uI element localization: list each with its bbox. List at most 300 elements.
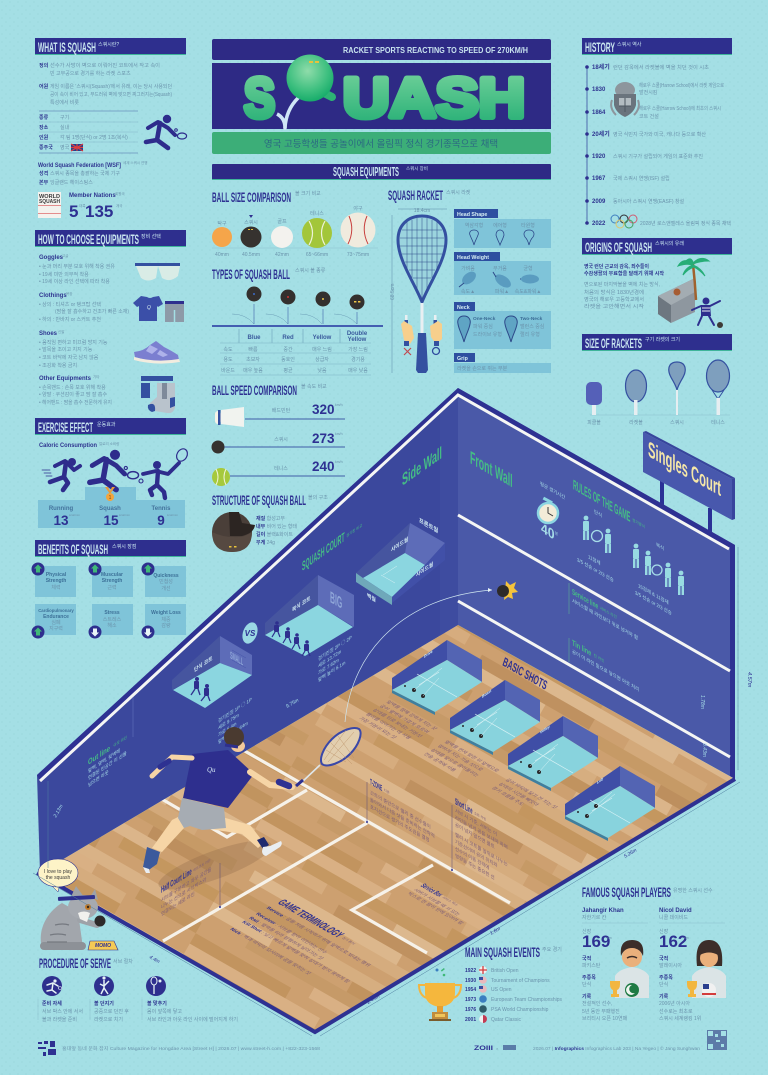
panel: squash racket (388, 187, 551, 373)
head shape panel: Head Shape (457, 212, 487, 218)
origins text: 처음의 방식은 1830년경에 (584, 289, 644, 296)
basic shots (357, 640, 655, 841)
member nations stat: 대륙 (79, 203, 86, 208)
head weight panel: 균형 (523, 265, 533, 272)
cat body (40, 886, 106, 950)
events list: US Open (491, 987, 512, 993)
subtitle band: 영국 고등학생들 공놀이에서 올림픽 정식 경기종목으로 채택 (264, 138, 498, 150)
timeline: 1830 (592, 87, 606, 93)
racket labels: 스쿼시 (670, 419, 684, 426)
heading: PROCEDURE OF SERVE (39, 955, 111, 971)
comparison table: Yellow (348, 337, 367, 343)
timeline: 코트 건설 (639, 113, 659, 120)
floor lines (160, 750, 510, 953)
half court line note: 하프코트 라인 (193, 857, 211, 873)
stats: 선수로는 최초로 (659, 1008, 693, 1015)
small court: 단식 코트 (194, 654, 212, 674)
definition text: 정의 (39, 62, 49, 69)
stats: 국적 (659, 955, 669, 962)
heading: 스쿼시 역사 (617, 41, 642, 48)
speed values: km/h (335, 460, 343, 464)
short line note: 라인을 넘겨 공을 보내야 하며 (455, 814, 508, 851)
neck panel: 밸런스 중심 (520, 323, 544, 330)
shot text: volley (490, 777, 560, 818)
events list: PSA World Championship (491, 1007, 549, 1013)
card labels: Weight Loss (151, 610, 181, 616)
credits: 2026.07 | Infographics Infographics Lab 203 | Na Yegeo | © Jang Sunghwan (533, 1046, 701, 1051)
step text: 볼 던지기 (94, 1000, 114, 1007)
ball labels: 42mm (275, 252, 289, 258)
member nations stat (69, 191, 125, 221)
court structure: 사이드월 (416, 560, 433, 579)
big court specs: 앞벽 높이 6.1m (318, 659, 345, 684)
racket (296, 728, 361, 786)
calorie stats: kcal/min (69, 513, 80, 517)
comparison table: 용도 (223, 357, 233, 363)
vs badge (240, 620, 260, 646)
shoes text: Shoes (39, 331, 58, 337)
definition text: 빈 고무공으로 경기를 하는 라켓 스포츠 (50, 70, 131, 77)
comparison table: 초보자 (246, 356, 260, 363)
big court specs: 경기인원 2P ◯ 2P (318, 634, 352, 663)
ball trajectory (345, 581, 518, 722)
panel: types of squash ball (212, 266, 383, 375)
speed values: km/h (335, 403, 343, 407)
heading: HISTORY (585, 39, 615, 55)
events list (465, 966, 563, 1023)
court structure: 사이드월 (391, 535, 408, 554)
icon: cut ball (212, 512, 255, 552)
events list: 1922 (465, 968, 476, 974)
doubles players: 15점제 & 11점제 (638, 582, 669, 607)
federation info: 스쿼시 종목을 총괄하는 국제 기구 (50, 170, 120, 177)
out line note: 연결된 빈공간 이 선을 (88, 749, 127, 782)
federation info: 성격 (39, 170, 49, 177)
facts table: 종주국 (39, 145, 53, 151)
half court line note (161, 853, 221, 918)
dimensions (33, 547, 752, 1036)
panel: procedure of serve (38, 955, 238, 1023)
portrait (687, 940, 726, 998)
card grid (35, 566, 186, 635)
heading: squash equipments band: SQUASH EQUIPMENTS (333, 164, 399, 179)
wall lines (40, 395, 730, 781)
stats: 2006년 아시아 (659, 1000, 690, 1007)
heading (573, 476, 645, 534)
head (224, 727, 245, 752)
medal: 1 (109, 495, 112, 501)
heading: SQUASH COURT (302, 529, 345, 574)
top strap (212, 39, 551, 60)
facts table: 구기 (60, 114, 69, 121)
comparison table: Double (347, 331, 368, 337)
definition text: 어원 (39, 83, 49, 90)
panel: exercise effect (35, 418, 190, 528)
timeline: 1920 (592, 154, 606, 160)
short line note: 기준선이며 공의 위치와 (455, 838, 498, 870)
clothings text: • 상의 : 티셔츠 or 탱크탑 선택 (39, 301, 101, 308)
comparison table: Yellow (313, 335, 332, 341)
singles players: 단식 (594, 508, 602, 520)
name: Jahangir Khan (582, 908, 624, 914)
heading (388, 187, 471, 203)
stats (659, 928, 701, 1022)
comparison table: 매우 느림 (312, 346, 332, 353)
doubles players: 복식 (656, 541, 664, 553)
service box note: Service Box (418, 882, 445, 898)
player (143, 727, 361, 873)
facts table: 각 팀 1명(단식) or 2명 1조(복식) (60, 134, 128, 141)
big court: BIG (330, 588, 342, 613)
neck panel: Two-Neck (520, 316, 543, 322)
shot text: drive (357, 699, 439, 748)
icon: squash player (146, 115, 187, 148)
speed values: 240 (312, 459, 335, 474)
torso (183, 750, 254, 808)
heading: benefits: 스쿼시 장점 (112, 543, 136, 550)
measure labels: 0.43m (701, 743, 707, 757)
other equipments text (39, 374, 112, 406)
speed values: 273 (312, 431, 335, 446)
ball labels: 테니스 (310, 210, 324, 217)
timeline: 18세기 (592, 63, 610, 71)
player: jahangir khan (582, 908, 649, 1022)
top strap: RACKET SPORTS REACTING TO SPEED OF 270KM/H (343, 46, 528, 55)
footer (38, 1030, 727, 1056)
terms list: Rail : 옆벽을 따라 평행하게 날아가는 샷 (247, 916, 326, 961)
icon: shuttlecock (215, 407, 244, 427)
comparison table: 평균 (283, 367, 293, 374)
calorie stats: 15 (103, 513, 119, 528)
stats: 기록 (659, 993, 669, 1000)
half court line note: 나누는 선으로 서브박스와 (161, 876, 207, 911)
speech bubble: I love to play (44, 869, 73, 875)
step text: 공중으로 던진 후 (94, 1008, 129, 1015)
head weight panel: 무거움 (493, 265, 507, 272)
panel: origins of squash (582, 238, 732, 328)
stat: average time: 40 (541, 519, 555, 543)
speed values: 스쿼시 (274, 436, 288, 443)
t-zone note: 티존 (384, 787, 390, 796)
icon: socks and bands (141, 376, 175, 413)
small court specs: 경기인원 1P ◯ 1P (218, 696, 252, 725)
name: Nicol David (659, 908, 692, 914)
small court players (191, 677, 210, 701)
stats (582, 928, 628, 1022)
stats: 169 (582, 932, 610, 951)
heading: what is squash: 스쿼시란? (98, 41, 119, 48)
half court line note: Half Court Line (161, 866, 192, 895)
heading (212, 189, 321, 205)
other equipments text: 기타 (93, 374, 100, 379)
name: 자한기르 칸 (582, 914, 607, 921)
comparison table: 속도 (223, 346, 233, 353)
podium (38, 487, 185, 528)
heading: exercise effect: 운동효과 (97, 421, 116, 428)
out line note: Out line (88, 743, 110, 767)
grip panel: Grip (457, 356, 469, 362)
heading: exercise effect: EXERCISE EFFECT (38, 419, 93, 435)
step text: 서브 라인과 아웃 라인 사이에 떨어지게 하기 (147, 1016, 238, 1023)
heading: ORIGINS OF SQUASH (585, 239, 652, 255)
shoes text: • 조깅화 착용 금지 (39, 362, 77, 369)
measure labels: 4.57m (746, 672, 752, 688)
step text (38, 999, 238, 1023)
service box note: 박스로 한 발이 안에 있어야 함 (405, 891, 466, 926)
shot text: drive: 가장 기본이 되는 샷 (357, 716, 399, 740)
shoes text (39, 329, 108, 369)
logo: world squash: WORLD (39, 194, 60, 200)
stats: 단식 (582, 981, 591, 988)
court structure: 프론트월 (419, 516, 439, 535)
measure labels: 5.26m (623, 848, 638, 860)
t-zone note: 코트의 중앙으로 랠리 중 선수들이 (370, 789, 431, 831)
small court specs (218, 696, 252, 746)
definition text (39, 62, 172, 106)
card labels: Physical (46, 572, 67, 578)
head shape panel (454, 209, 551, 248)
card labels: 민첩성 (159, 578, 173, 585)
shot text: drive: 랠리를 이어가는 데 사용 (364, 712, 414, 741)
bounce diagram (212, 286, 383, 326)
card labels: 스트레스 (103, 616, 122, 623)
t-zone note: 돌아와서 다음 샷을 준비하는 전략적 (370, 796, 435, 840)
logo: world squash (38, 192, 61, 218)
icon: stopwatch (538, 480, 566, 523)
neck panel (454, 302, 551, 349)
stats: 주종목 (582, 975, 596, 981)
stats: 파키스탄 (582, 962, 601, 969)
shot diagram: lob: Lob (597, 776, 604, 785)
structure text: 재질 합성고무 (256, 515, 285, 522)
heading: 주요 경기 (542, 946, 562, 953)
ball labels: 40.5mm (242, 252, 260, 258)
member nations stat: 5 (69, 202, 78, 221)
terms list: Kill Shot : 낮고 빠르게 앞벽을 맞혀 상대가 받지 못하게 함 (240, 920, 352, 984)
federation info: 본부 (39, 179, 49, 186)
heading: 스쿼시 라켓 (446, 189, 471, 196)
shot text: boast: 전술 공격에 사용 (422, 752, 458, 773)
timeline: 동아시아 스쿼시 연맹(EASF) 창설 (613, 198, 685, 205)
panel: title (212, 39, 551, 154)
badges (32, 562, 154, 638)
measure labels: 2.44m (365, 994, 381, 1006)
icon: tennis player (139, 447, 190, 498)
card labels: 해소 (107, 622, 117, 629)
structure text: 무게 24g (256, 539, 275, 546)
heading: 볼 속도 비교 (301, 383, 327, 390)
grip panel (454, 353, 551, 373)
tin line note: 틴 라인 (594, 652, 605, 664)
panel: how to choose equipments (35, 230, 186, 413)
label: side wall: Side Wall (402, 442, 442, 490)
torso: Qu (207, 766, 216, 774)
head shape panel: 에어형 (493, 222, 507, 229)
partner logo: ZOIII (474, 1046, 493, 1052)
heading (212, 492, 328, 508)
head weight panel: 가벼움 (461, 265, 475, 272)
heading: 구기 라켓의 크기 (645, 336, 680, 343)
measure labels: 1.78m (699, 695, 705, 709)
panel: what is squash (35, 38, 187, 221)
sign: singles court (643, 431, 735, 534)
head shape panel: 타원형 (521, 222, 535, 229)
facts table: 장소 (39, 124, 49, 131)
ball labels: 골프 (277, 219, 287, 225)
shot diagram: drive (392, 640, 482, 715)
shot text: boast (422, 739, 501, 786)
heading: 경기 용어 (341, 936, 357, 945)
other equipments text: • 양말 : 쿠션감이 좋고 땀 잘 흡수 (39, 391, 107, 398)
events list: British Open (491, 968, 519, 974)
stats: 단식 (659, 981, 668, 988)
main title band (212, 54, 551, 129)
heading: GAME TERMINOLOGY (274, 897, 347, 940)
shoes text: • 발목을 조이고 지지 기능 (39, 346, 93, 353)
measure labels: 2.13m (52, 804, 65, 820)
member nations stat: 135 (85, 202, 113, 221)
federation info (38, 160, 148, 186)
card labels: Strength (102, 578, 122, 584)
main title band: S (244, 66, 275, 129)
heading: BALL SIZE COMPARISON (212, 189, 291, 205)
comparison table: 가장 느림 (348, 346, 368, 353)
events list: Qatar Classic (491, 1017, 522, 1023)
heading (274, 897, 361, 947)
comparison table: Blue (247, 335, 261, 341)
timeline: 2009 (592, 199, 606, 205)
stats: 신장 (582, 928, 592, 935)
card labels: 심폐 (51, 619, 61, 626)
heading: how to choose: HOW TO CHOOSE EQUIPMENTS (38, 231, 139, 247)
panel: main squash events (419, 944, 563, 1023)
head weight panel: 속도&파워▲ (515, 288, 541, 295)
step text: 몸이 앞쪽에 닿고 (147, 1008, 182, 1015)
speed values: 테니스 (274, 465, 288, 472)
terms list: Receiver : 서브를 받아 리턴하는 선수 (254, 912, 330, 955)
timeline: 런던 감옥에서 라켓볼에 벽을 치던 것이 시초 (613, 64, 709, 71)
shot diagram: lob (565, 766, 655, 841)
comparison table: Red (282, 335, 294, 341)
goggles text: Goggles (39, 255, 64, 261)
member nations stat: 개국 (116, 203, 123, 208)
clothings text: (땀을 잘 흡수하고 건조가 빠른 소재) (55, 308, 129, 315)
icon: shirt and shorts: Q (147, 305, 151, 311)
calorie stats: kcal/min (119, 513, 130, 517)
legs (143, 812, 282, 873)
icon: runner (42, 458, 80, 490)
shot diagram: boast: Boast (482, 687, 492, 699)
heading: 볼 크기 비교 (295, 190, 321, 197)
ball labels: 야구 (353, 205, 363, 212)
player: nicol david (659, 908, 726, 1022)
icon: shirt and shorts (133, 296, 184, 322)
shot text: volley: 공이 바닥에 닿기 전 치는 샷 (503, 777, 560, 810)
heading: squash equipments band (212, 164, 551, 180)
doubles players (633, 541, 684, 617)
out line note (88, 697, 133, 789)
t-zone note: T-ZONE (370, 777, 382, 793)
partner logo (474, 1045, 516, 1052)
shot text: drive: 앞벽을 향해 강하게 치는 샷 (384, 699, 439, 731)
card labels: Cardiopulmonary (38, 608, 74, 613)
step icons (42, 976, 166, 996)
heading: 경기장 비교 (346, 521, 363, 539)
panel: squash court comparison (172, 516, 445, 746)
comparison table: 동호인 (281, 356, 295, 363)
ball labels (215, 205, 369, 258)
timeline: 20세기 (592, 130, 610, 138)
measure labels: 4.4m (148, 954, 161, 965)
heading: 스쿼시의 유래 (655, 240, 684, 247)
heading: 경기방식 (632, 516, 645, 530)
heading: 서브 절차 (113, 958, 133, 965)
court structure: 백월 (367, 591, 376, 604)
panel: history (582, 38, 732, 228)
heading: STRUCTURE OF SQUASH BALL (212, 492, 306, 508)
panel: ball size comparison (212, 189, 378, 258)
cat mascot (38, 859, 118, 950)
member nations stat: 회원국 (115, 191, 125, 196)
service box note (405, 882, 480, 926)
origins text (584, 263, 664, 310)
federation info: 세계 스쿼시 연맹 (123, 160, 148, 165)
card labels: 체중 (161, 616, 171, 623)
events list: 1976 (465, 1007, 476, 1013)
arms (152, 757, 292, 787)
racket diagram (390, 208, 447, 373)
speech bubble: the squash (46, 875, 70, 881)
service box note: 서비스 박스 (441, 895, 461, 907)
icon: shoe (134, 341, 180, 364)
service line note: 서비스 라인 (600, 604, 617, 620)
speed values: 320 (312, 402, 335, 417)
timeline: 발전시킴 (639, 89, 657, 96)
out line note: 넘으면 아웃 (88, 768, 109, 789)
origins text: 영국의 해로우 고등학교에서 (584, 296, 644, 303)
events list: 1973 (465, 997, 476, 1003)
facts table: 종류 (39, 114, 49, 121)
stats: 전설적인 선수, (582, 1000, 612, 1007)
origins text: 면으로된 마지막볼을 벽에 치는 방식, (584, 281, 660, 288)
grip panel: 라켓을 손으로 쥐는 부분 (457, 365, 508, 372)
terms list: Service : 공을 처음 시작하기 위해 앞벽으로 보내는 행위 (264, 905, 373, 968)
tin line note: 공이 이 라인 밑으로 닿으면 아웃 처리 (572, 648, 639, 694)
timeline: 스쿼시 기구가 설립되어 게임의 표준화 추진 (613, 153, 703, 160)
other equipments text: • 손목밴드 : 손목 보호 위해 착용 (39, 384, 106, 391)
t-zone note (366, 777, 435, 847)
clothings text (39, 291, 129, 323)
name (659, 908, 725, 923)
structure text: 내부 비어 있는 형태 (256, 523, 297, 530)
icon: tennis ball (212, 468, 230, 486)
head weight panel: 속도▲ (461, 288, 475, 295)
origins text: 수감생활의 무료함을 달래기 위해 시작 (584, 270, 664, 277)
shot text: volley: 경기 흐름을 주도 (490, 786, 526, 807)
goggles text: 고글 (62, 254, 69, 258)
terms list: Nick : 벽과 바닥의 모서리에 공을 맞히는 샷 (228, 927, 313, 976)
shot text: volley: 상대의 시간을 빼앗아 (496, 782, 541, 807)
heading: 스쿼시 볼 종류 (295, 267, 326, 274)
heading: how to choose: 장비 선택 (141, 233, 161, 240)
card labels (38, 572, 181, 632)
facts table: 실내 (60, 124, 70, 131)
shoes text: 신발 (58, 329, 65, 334)
panel: benefits of squash (32, 540, 186, 638)
heading: 볼의 구조 (308, 494, 328, 501)
comparison table: 낮음 (317, 367, 327, 374)
shot diagram: drive: Drive (424, 648, 433, 659)
